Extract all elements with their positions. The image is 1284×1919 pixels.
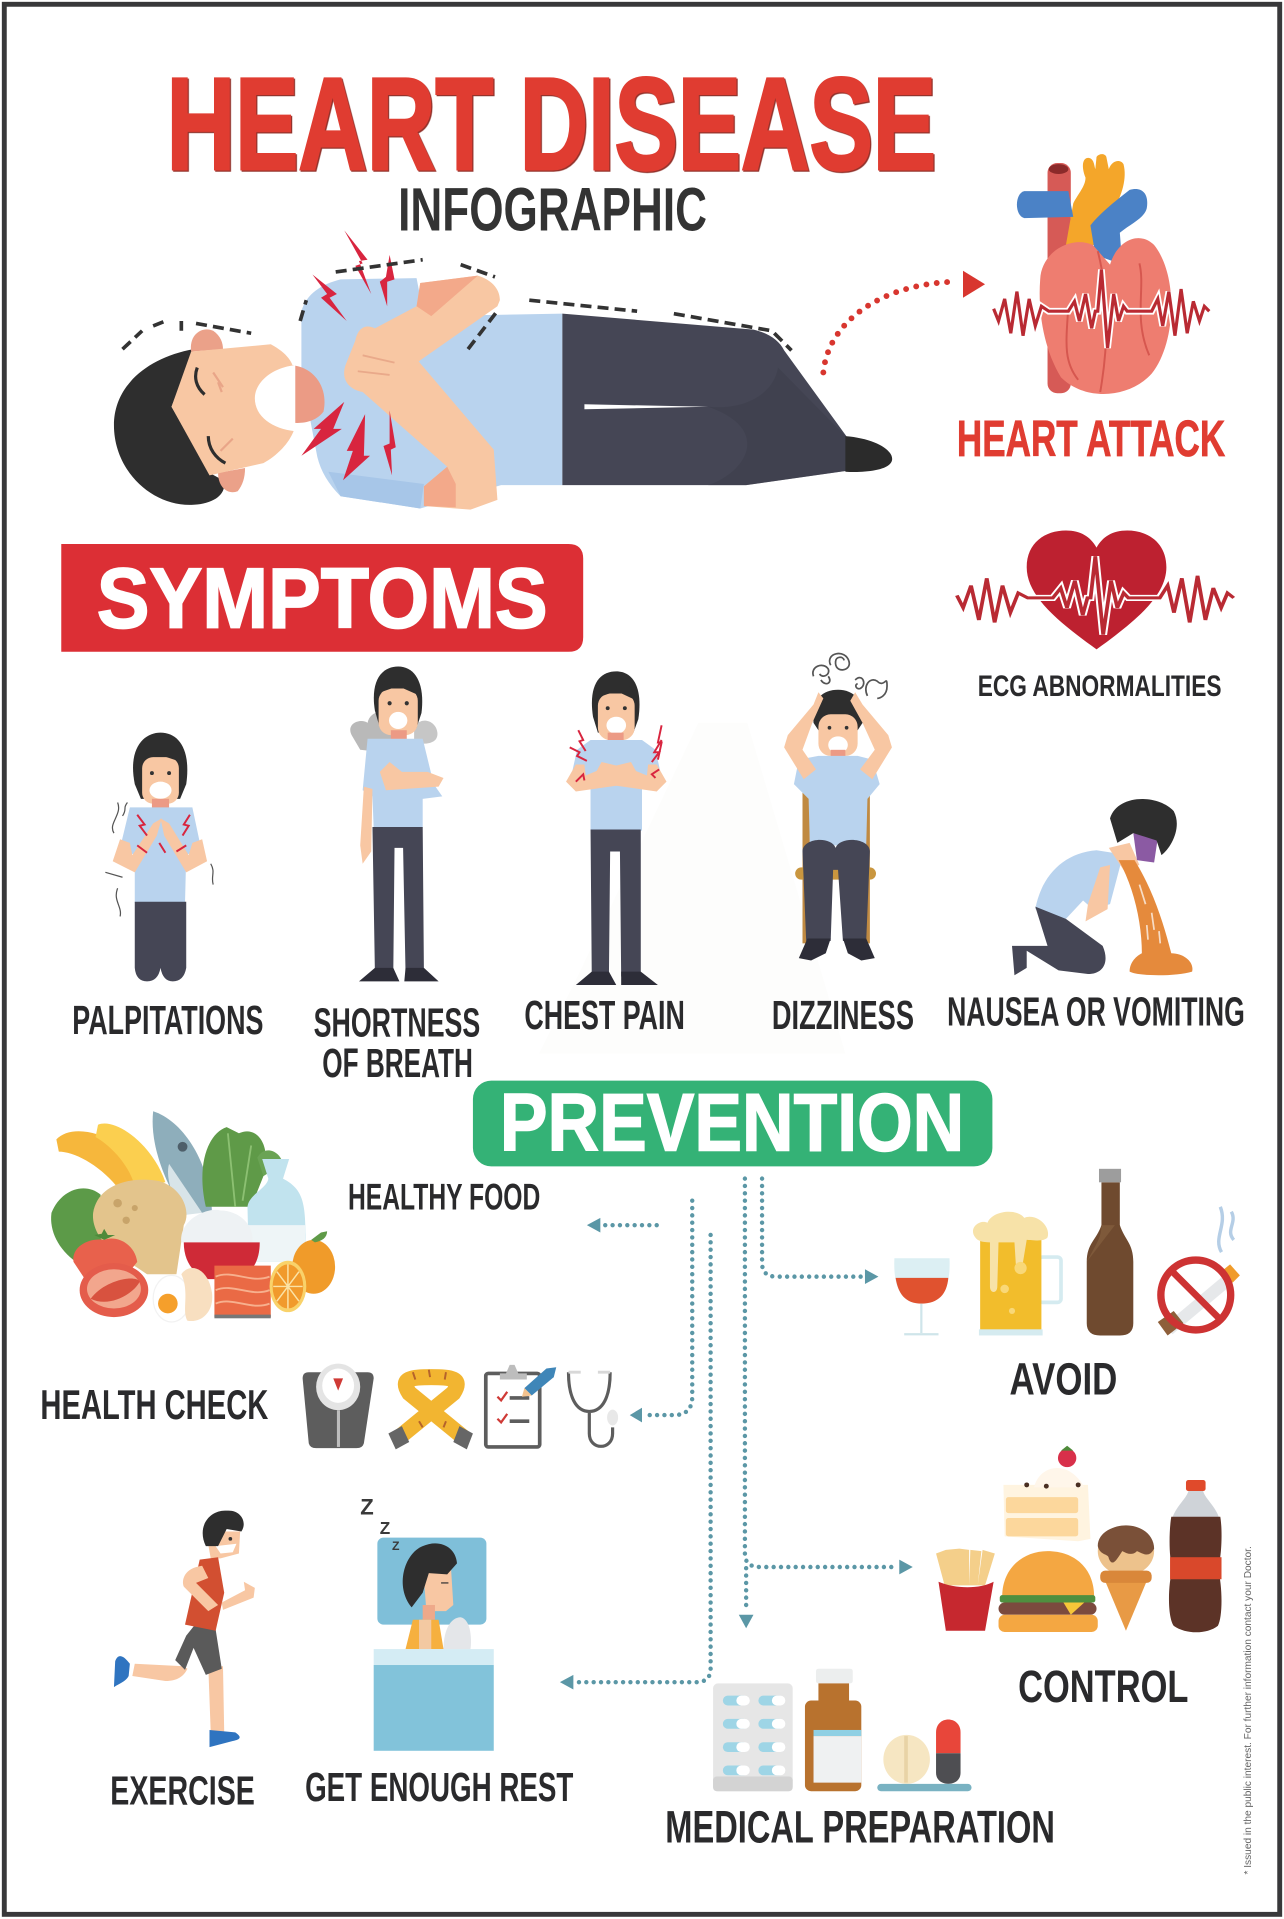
label: shortness of breath: OF BREATH [322, 1040, 473, 1086]
label: get enough rest: GET ENOUGH REST [305, 1764, 574, 1810]
icon: stethoscope [568, 1372, 618, 1446]
label: healthy food: HEALTHY FOOD [348, 1176, 540, 1217]
subtitle: INFOGRAPHIC [398, 175, 707, 243]
icon: clipboard [486, 1365, 556, 1447]
arrow: to rest [560, 1235, 711, 1690]
label: shortness of breath [314, 1000, 480, 1086]
label: health check: HEALTH CHECK [40, 1381, 268, 1428]
arrow: dotted curve to heart [823, 271, 985, 372]
figure: shortness of breath [350, 666, 444, 981]
figure: sleeping person in bed: Z [392, 1539, 400, 1553]
figure: exercise runner [114, 1511, 255, 1747]
figure: sleeping person in bed: Z [380, 1518, 390, 1538]
icon: cake [1003, 1446, 1090, 1541]
icon: medicine bottle [805, 1669, 861, 1791]
icon: bottle [1087, 1169, 1133, 1335]
figure: sleeping person in bed: Z [360, 1494, 374, 1519]
arrow: to control and medical preparation [739, 1179, 913, 1628]
label: avoid: AVOID [1010, 1353, 1117, 1404]
figure: chest pain [566, 671, 667, 985]
label: ecg abnormalities: ECG ABNORMALITIES [978, 670, 1222, 703]
icon: pills on tray [877, 1720, 972, 1791]
icon: no smoking [1158, 1207, 1240, 1335]
figure: nausea or vomiting [1012, 799, 1192, 975]
icon: heart with ecg [994, 154, 1209, 394]
figure: palpitations [105, 733, 213, 981]
arrow: to health check [630, 1201, 692, 1422]
icon: burger [999, 1551, 1098, 1632]
illustration: man lying with chest pain [114, 230, 892, 510]
panel: symptoms banner: SYMPTOMS [97, 550, 548, 646]
figure: dizziness [784, 654, 892, 961]
label: medical preparation: MEDICAL PREPARATION [665, 1802, 1055, 1853]
figure: sleeping person in bed [360, 1494, 494, 1751]
label: chest pain: CHEST PAIN [524, 992, 685, 1038]
label: control: CONTROL [1018, 1661, 1188, 1712]
icon: ecg heart [957, 531, 1234, 649]
disclaimer: * Issued in the public interest. For further information contact your Doctor. [1243, 1546, 1254, 1875]
icon: ice cream [1098, 1525, 1154, 1631]
icon: wine glass [894, 1258, 950, 1334]
arrow: to avoid [762, 1179, 878, 1284]
label: palpitations: PALPITATIONS [72, 997, 263, 1043]
label: dizziness: DIZZINESS [772, 992, 914, 1038]
icon: healthy food group [51, 1111, 335, 1322]
icon: fries [936, 1549, 995, 1631]
title: HEART DISEASE [167, 50, 936, 197]
arrow: to healthy food [587, 1218, 662, 1233]
icon: cola bottle [1169, 1480, 1222, 1632]
panel: prevention banner: PREVENTION [500, 1077, 964, 1168]
label: shortness of breath: SHORTNESS [314, 1000, 480, 1046]
label: exercise: EXERCISE [110, 1768, 255, 1814]
icon: weighing scale [303, 1364, 374, 1448]
icon: blister pack [713, 1683, 793, 1791]
icon: measuring tape [388, 1370, 473, 1449]
icon: beer mug [973, 1212, 1061, 1335]
